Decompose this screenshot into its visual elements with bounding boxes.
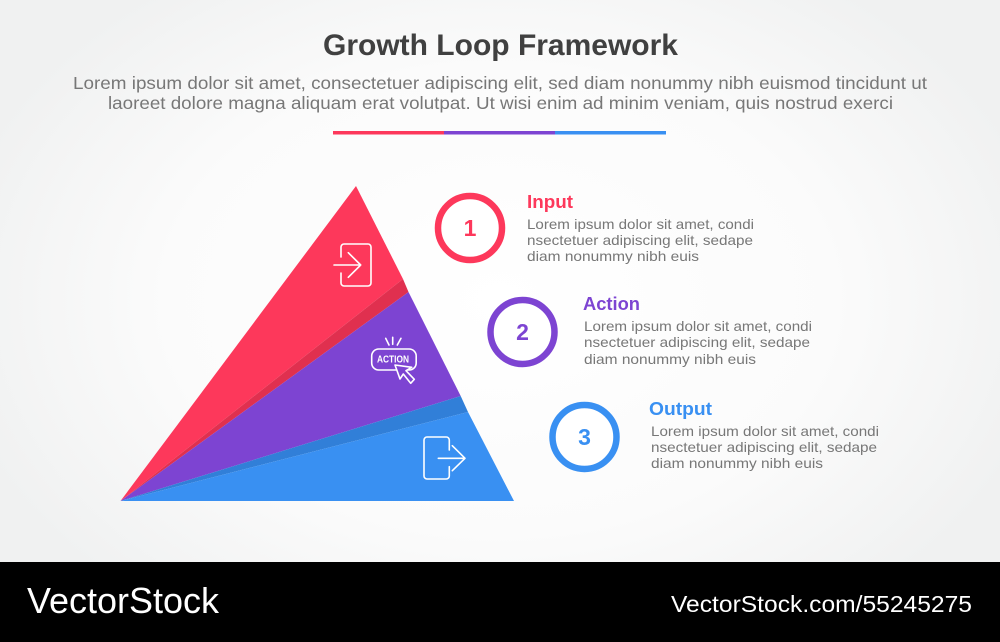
description 2: diam nonummy nibh euis bbox=[584, 351, 756, 367]
description 2 bbox=[584, 318, 812, 367]
icon: input arrow into door bbox=[334, 244, 371, 286]
segment: input (red) bbox=[120, 186, 403, 501]
number circle 2: 2 bbox=[516, 319, 529, 345]
watermark footer bar bbox=[0, 562, 1000, 642]
heading: action: Action bbox=[583, 294, 640, 314]
heading: output: Output bbox=[649, 399, 712, 419]
description 3: Lorem ipsum dolor sit amet, condi bbox=[651, 423, 879, 439]
subtitle text block: Lorem ipsum dolor sit amet, consectetuer adipiscing elit, sed diam nonummy nibh euismod tincidunt ut bbox=[73, 73, 927, 93]
footer logo text: VectorStock bbox=[27, 580, 220, 621]
description 2: Lorem ipsum dolor sit amet, condi bbox=[584, 318, 812, 334]
number circle 1 bbox=[438, 196, 502, 260]
number circle 2 bbox=[490, 300, 554, 364]
number circle 1: 1 bbox=[464, 215, 477, 241]
heading: input: Input bbox=[527, 192, 573, 212]
subtitle text block bbox=[73, 73, 927, 113]
icon: action button with cursor bbox=[372, 337, 416, 383]
description 3 bbox=[651, 423, 879, 471]
description 3: diam nonummy nibh euis bbox=[651, 455, 823, 471]
subtitle text block: laoreet dolore magna aliquam erat volutpat. Ut wisi enim ad minim veniam, quis nostrud exerci bbox=[108, 93, 893, 113]
tricolour divider bbox=[333, 131, 666, 134]
description 1: Lorem ipsum dolor sit amet, condi bbox=[527, 216, 754, 232]
icon: action button with cursor: ACTION bbox=[377, 355, 409, 366]
number circle 3 bbox=[552, 405, 616, 469]
footer url: VectorStock.com/55245275 bbox=[671, 591, 972, 617]
title: Growth Loop Framework bbox=[323, 29, 678, 62]
description 3: nsectetuer adipiscing elit, sedape bbox=[651, 439, 877, 455]
step 2: action bbox=[490, 294, 812, 367]
segment: output (blue) bbox=[120, 412, 514, 501]
number circle 3: 3 bbox=[578, 424, 591, 450]
segment shadow: red bbox=[120, 279, 408, 501]
segment shadow: blue bbox=[120, 396, 468, 501]
pyramid chart bbox=[120, 186, 514, 501]
description 1: nsectetuer adipiscing elit, sedape bbox=[527, 232, 753, 248]
description 1: diam nonummy nibh euis bbox=[527, 248, 699, 264]
step 3: output bbox=[552, 399, 879, 471]
description 2: nsectetuer adipiscing elit, sedape bbox=[584, 334, 810, 350]
segment: action (purple) bbox=[120, 292, 461, 501]
description 1 bbox=[527, 216, 754, 264]
icon: output arrow out of door bbox=[424, 437, 465, 479]
step 1: input bbox=[438, 192, 754, 264]
